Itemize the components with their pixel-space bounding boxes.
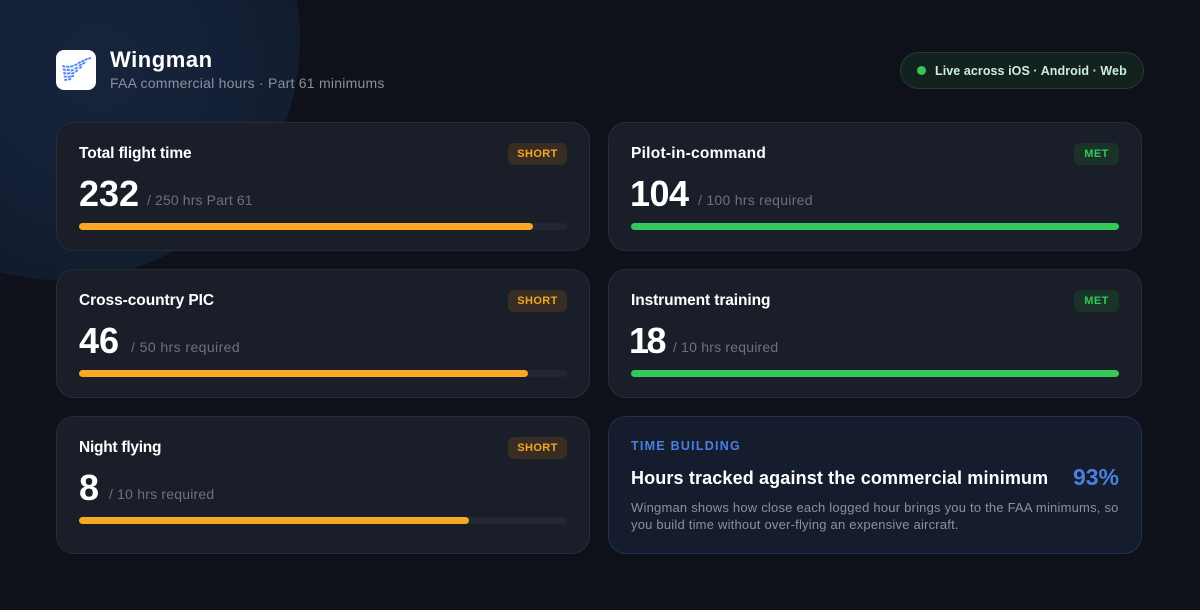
panel: total flight time <box>56 122 590 251</box>
panel title: Night flying <box>79 439 161 456</box>
target: / 10 hrs required <box>109 486 214 502</box>
target: / 10 hrs required <box>673 339 778 355</box>
target: / 250 hrs Part 61 <box>147 192 253 208</box>
panel title: Instrument training <box>631 292 770 309</box>
panel title: Total flight time <box>79 145 192 162</box>
header: brand <box>56 47 385 91</box>
status pill <box>900 52 1144 89</box>
value: 46 <box>79 320 119 361</box>
progress bar <box>79 370 567 377</box>
status dot <box>917 66 926 75</box>
status tag <box>1074 143 1119 165</box>
eyebrow label: TIME BUILDING <box>631 439 741 453</box>
progress bar <box>79 517 567 524</box>
status tag: SHORT <box>517 442 558 454</box>
status tag <box>508 143 567 165</box>
progress bar <box>631 223 1119 230</box>
value: 8 <box>79 467 99 508</box>
status text: Live across iOS · Android · Web <box>935 64 1127 78</box>
target: / 50 hrs required <box>131 339 240 355</box>
background glow circle <box>0 0 300 280</box>
status tag <box>1074 290 1119 312</box>
status tag: SHORT <box>517 295 558 307</box>
status tag <box>508 437 567 459</box>
progress bar <box>631 370 1119 377</box>
value: 232 <box>79 173 139 214</box>
panel: time building callout <box>608 416 1142 554</box>
panel title: Pilot-in-command <box>631 145 766 162</box>
brand tagline: FAA commercial hours · Part 61 minimums <box>110 75 385 91</box>
callout body: Wingman shows how close each logged hour brings you to the FAA minimums, so <box>631 500 1119 515</box>
callout body: you build time without over-flying an expensive aircraft. <box>631 517 959 532</box>
callout heading: Hours tracked against the commercial minimum <box>631 468 1048 488</box>
target: / 100 hrs required <box>698 192 813 208</box>
brand name: Wingman <box>110 47 213 72</box>
status tag: SHORT <box>517 148 558 160</box>
callout body <box>631 500 1119 532</box>
percentage: 93% <box>1073 464 1119 490</box>
panel: pilot-in-command <box>608 122 1142 251</box>
panel: cross-country PIC <box>56 269 590 398</box>
panel title: Cross-country PIC <box>79 292 214 309</box>
status tag: MET <box>1084 295 1109 307</box>
panel: night flying <box>56 416 590 554</box>
status tag: MET <box>1084 148 1109 160</box>
progress bar <box>79 223 567 230</box>
value: 18 <box>629 320 664 361</box>
value: 104 <box>630 173 689 214</box>
panel: instrument training <box>608 269 1142 398</box>
status tag <box>508 290 567 312</box>
icon: Wingman logo <box>56 50 96 90</box>
